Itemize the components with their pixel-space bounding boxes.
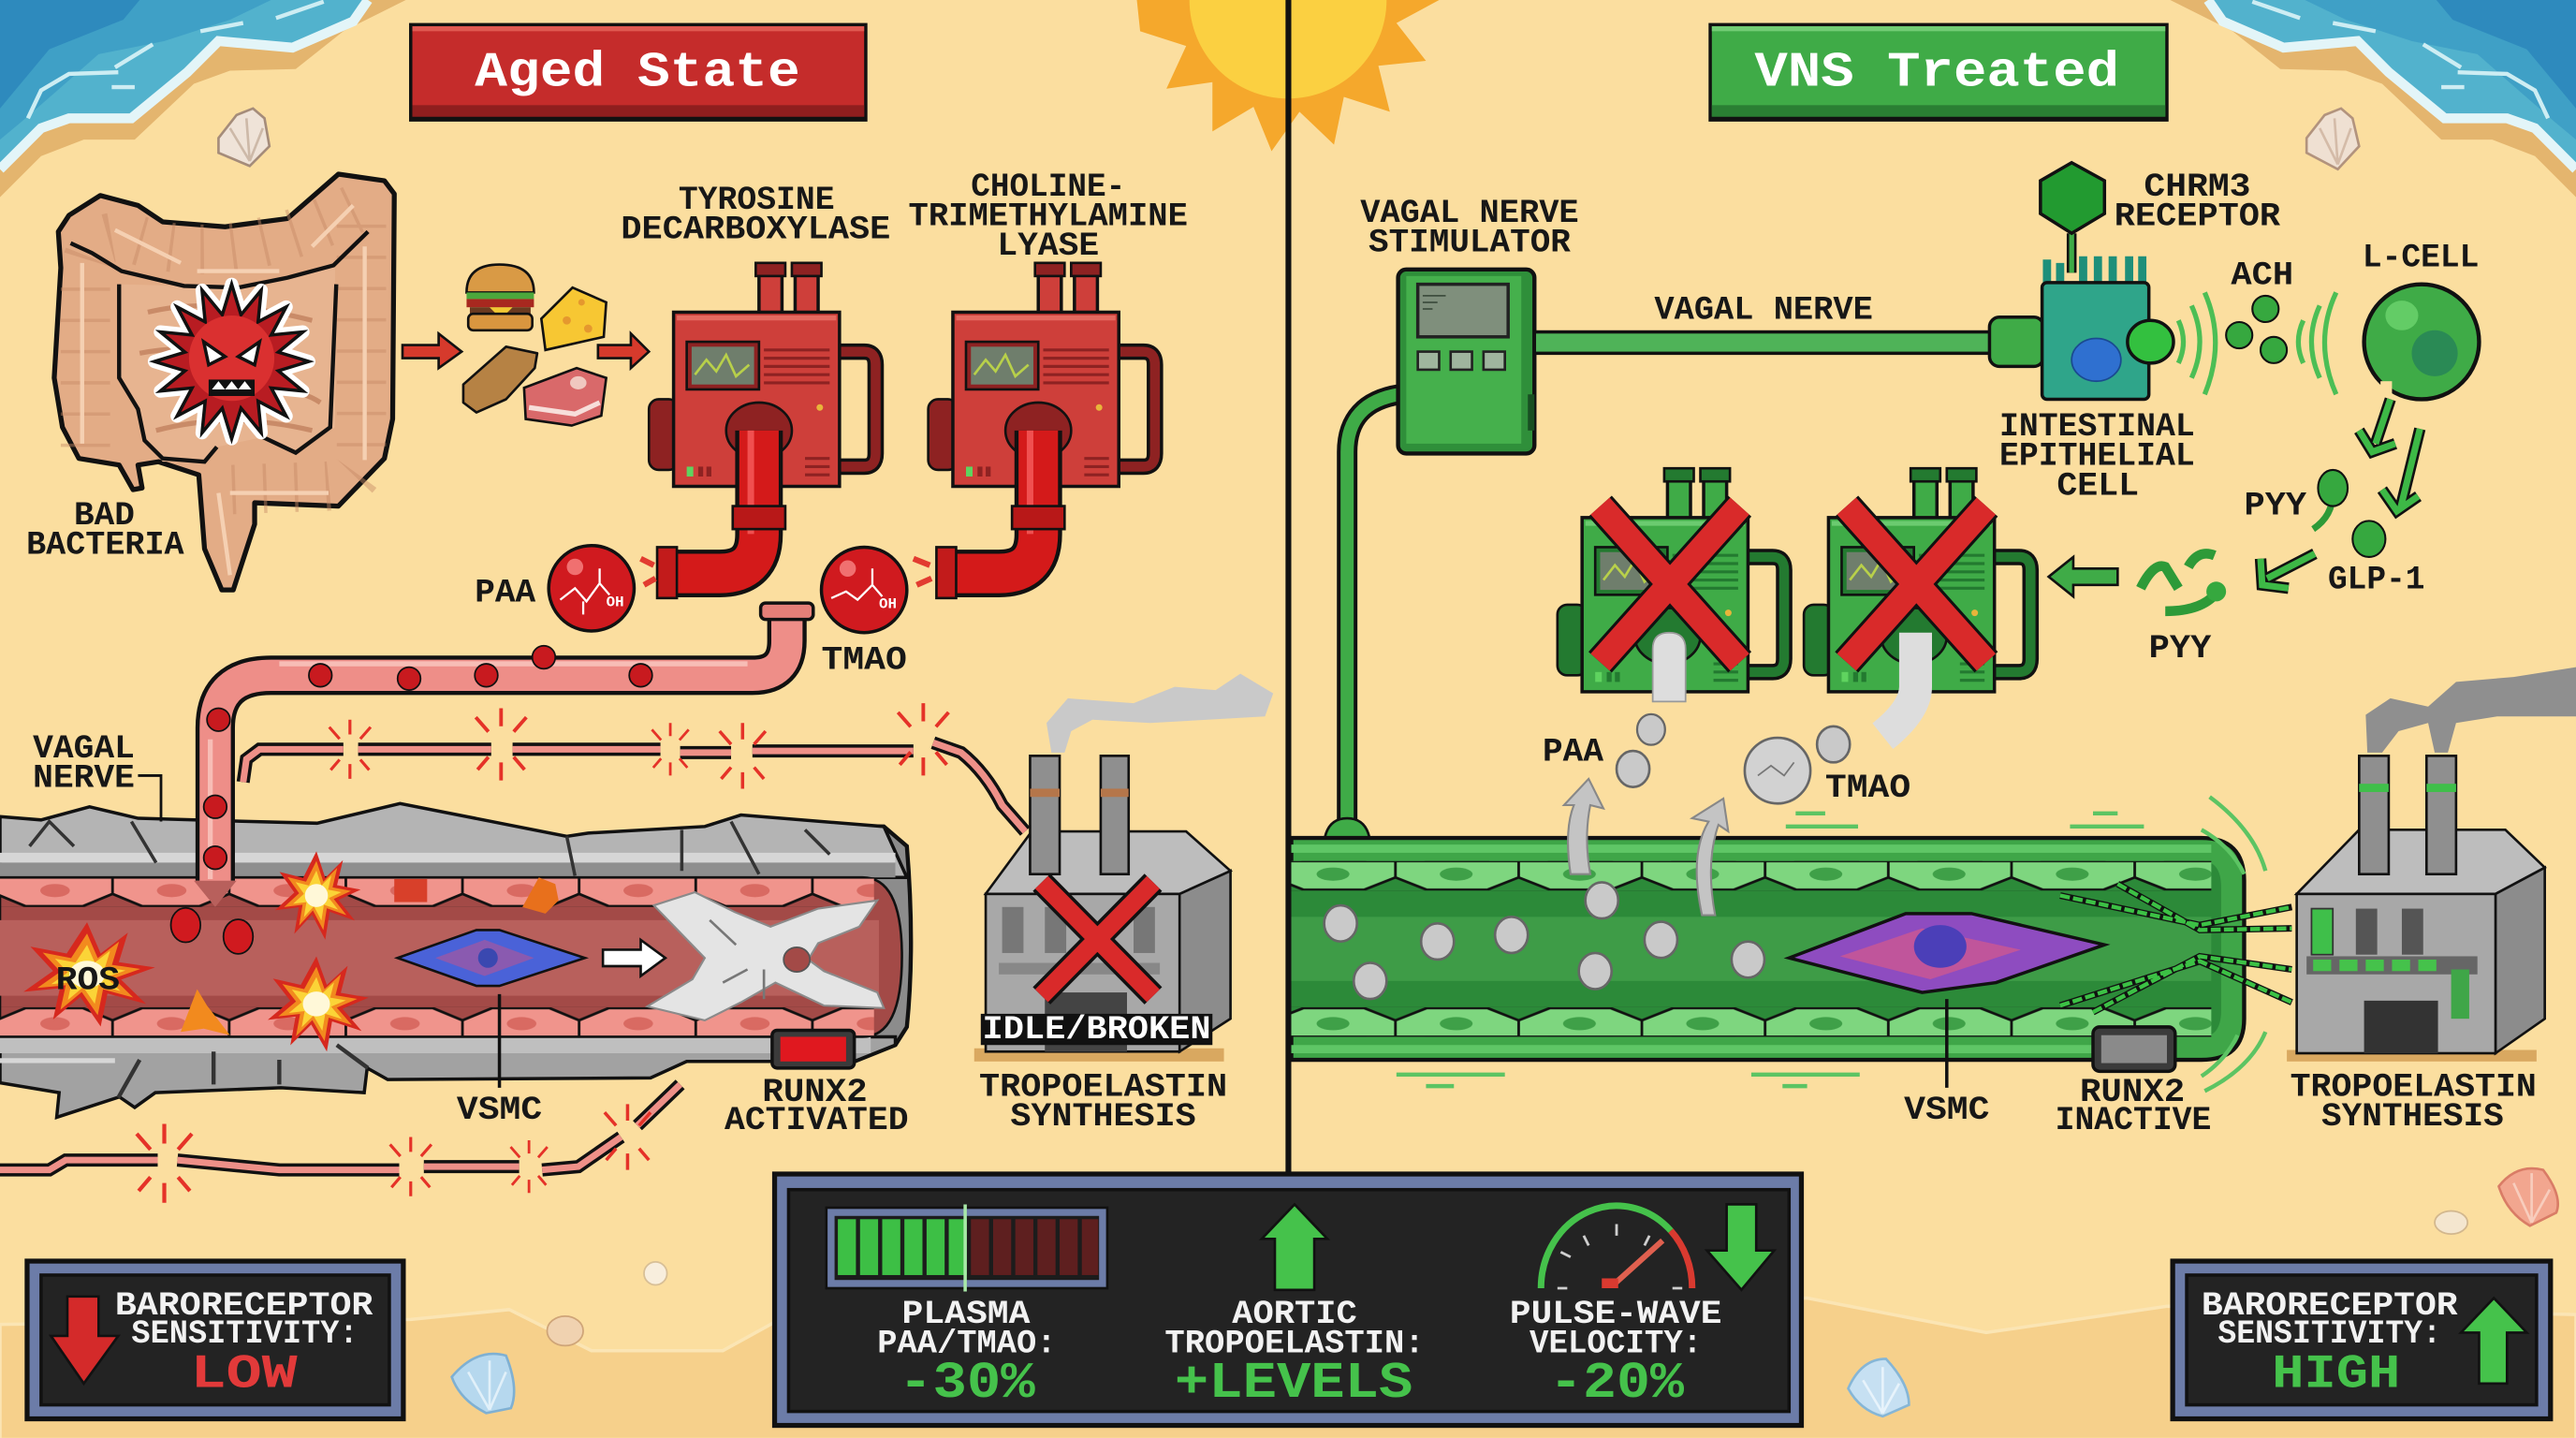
burst upper bbox=[275, 851, 360, 940]
metric: aortic tropoelastin: AORTIC bbox=[1232, 1296, 1357, 1333]
machine inhibited 2 bbox=[1804, 468, 2030, 736]
cable to artery bbox=[1325, 394, 1399, 842]
arrow: food to enzyme bbox=[598, 333, 649, 368]
centre divider bbox=[1285, 0, 1292, 1177]
vsmc cell healthy bbox=[1789, 914, 2104, 992]
label: PYY lower: PYY bbox=[2149, 630, 2211, 668]
label: chrm3 receptor: CHRM3 bbox=[2144, 169, 2250, 206]
label: L-cell: L-CELL bbox=[2363, 239, 2479, 276]
pebble right bbox=[2435, 1211, 2467, 1234]
burst ROS bbox=[23, 922, 155, 1026]
receptor hexagon bbox=[2041, 163, 2104, 272]
metric: aortic tropoelastin: TROPOELASTIN: bbox=[1164, 1325, 1425, 1362]
metric: pulse wave velocity: VELOCITY: bbox=[1530, 1325, 1702, 1362]
RUNX2 switch red bbox=[772, 1030, 855, 1068]
label: tropoelastin synthesis left bbox=[979, 1069, 1227, 1136]
label: vsmc right: VSMC bbox=[1904, 1092, 1989, 1129]
molecule: TMAO bbox=[822, 547, 907, 633]
metric: plasma: PAA/TMAO: bbox=[877, 1325, 1057, 1362]
ach molecules bbox=[2226, 296, 2287, 363]
shell bottom blue right bbox=[1848, 1358, 1909, 1416]
label: vsmc right bbox=[1904, 999, 1989, 1129]
label: vagal nerve stimulator: VAGAL NERVE bbox=[1360, 195, 1579, 232]
label: tropoelastin synthesis left: TROPOELASTIN bbox=[979, 1069, 1227, 1107]
label: runx2 inactive bbox=[2056, 1074, 2211, 1139]
damaged vagal nerve bbox=[0, 703, 1025, 1203]
label: bad bacteria: BACTERIA bbox=[26, 526, 185, 564]
metric: pulse wave velocity: PULSE-WAVE bbox=[1510, 1296, 1721, 1333]
burst lower bbox=[268, 957, 369, 1051]
label: vagal nerve stimulator bbox=[1360, 195, 1579, 262]
label: vagal nerve left bbox=[33, 730, 161, 822]
title: vns treated bbox=[1708, 23, 2169, 122]
label: chrm3 receptor bbox=[2115, 169, 2281, 235]
machine: choline trimethylamine lyase bbox=[914, 263, 1155, 598]
label: runx2 inactive: RUNX2 bbox=[2080, 1074, 2185, 1111]
molecule: TMAO: OH bbox=[879, 595, 897, 612]
motion ticks bbox=[1397, 797, 2265, 1091]
RUNX2 switch off bbox=[2093, 1027, 2175, 1071]
label: vagal nerve: VAGAL NERVE bbox=[1654, 291, 1873, 329]
label: vagal nerve stimulator: STIMULATOR bbox=[1368, 225, 1572, 262]
factory idle bbox=[974, 674, 1273, 1062]
panel: baroreceptor low bbox=[24, 1258, 406, 1421]
label: intestinal epithelial cell: INTESTINAL bbox=[1999, 408, 2195, 446]
label: tropoelastin synthesis right: SYNTHESIS bbox=[2321, 1098, 2504, 1136]
label: vagal nerve left: VAGAL bbox=[33, 730, 135, 768]
shell pink right bbox=[2499, 1168, 2558, 1225]
panel: vns treated bbox=[1292, 23, 2576, 1139]
arrows from L-cell bbox=[2261, 399, 2420, 588]
elastin fibres bbox=[2060, 884, 2291, 1012]
arrow to machines bbox=[2049, 557, 2117, 596]
text: baroreceptor sensitivity: BARORECEPTOR bbox=[115, 1287, 373, 1325]
text: baroreceptor sensitivity: SENSITIVITY: bbox=[2217, 1315, 2441, 1353]
factory active bbox=[2287, 668, 2576, 1062]
beach corner top left bbox=[0, 0, 406, 198]
label: choline trimethylamine lyase: TRIMETHYLAMINE bbox=[909, 198, 1188, 235]
metric: pulse wave velocity: -20% bbox=[1549, 1356, 1684, 1413]
value: high: HIGH bbox=[2272, 1348, 2400, 1401]
machine: tyrosine decarboxylase bbox=[640, 263, 875, 598]
signal waves bbox=[2178, 292, 2336, 394]
efflux arrows bbox=[1564, 779, 1728, 916]
aged artery bbox=[0, 803, 911, 1117]
label: vagal nerve left: NERVE bbox=[33, 760, 135, 798]
gauge: speedometer bbox=[1541, 1206, 1692, 1288]
label: tyrosine decarboxylase: DECARBOXYLASE bbox=[621, 211, 890, 248]
metric: aortic tropoelastin: +LEVELS bbox=[1175, 1356, 1412, 1413]
beach corner top right bbox=[2170, 0, 2576, 198]
label: runx2 activated bbox=[724, 1074, 909, 1139]
damage smear upper bbox=[394, 879, 427, 902]
arrow: bacteria to food bbox=[402, 333, 461, 368]
text: baroreceptor sensitivity bbox=[115, 1287, 373, 1353]
gauge: plasma level bar bbox=[827, 1204, 1107, 1292]
icon: unhealthy gut bbox=[54, 174, 394, 590]
metric: pulse wave velocity bbox=[1510, 1296, 1721, 1413]
label: idle broken: IDLE/BROKEN bbox=[983, 1011, 1211, 1049]
text: baroreceptor sensitivity: SENSITIVITY: bbox=[131, 1315, 359, 1353]
panel: aged state bbox=[0, 23, 1273, 1203]
label: choline trimethylamine lyase bbox=[909, 169, 1188, 265]
arrow: vsmc to calcification bbox=[603, 940, 666, 976]
label: PAA: PAA bbox=[475, 574, 536, 611]
label: TMAO right: TMAO bbox=[1825, 770, 1910, 807]
metric: plasma bbox=[877, 1296, 1057, 1413]
intestinal epithelial cell bbox=[2042, 257, 2174, 399]
lower wet sand bbox=[0, 1299, 2576, 1438]
label: runx2 inactive: INACTIVE bbox=[2056, 1102, 2211, 1139]
shell bottom blue left bbox=[452, 1354, 514, 1413]
label: ACH: ACH bbox=[2231, 257, 2293, 295]
pebble lower left bbox=[547, 1316, 583, 1345]
label: tyrosine decarboxylase bbox=[621, 182, 890, 248]
icon: green up arrow bbox=[1262, 1204, 1327, 1290]
shell top right bbox=[2306, 109, 2359, 169]
molecule PYY drop bbox=[2313, 470, 2348, 529]
icon: red down arrow bbox=[51, 1297, 118, 1384]
panel: baroreceptor high bbox=[2170, 1258, 2553, 1421]
label: choline trimethylamine lyase: LYASE bbox=[997, 227, 1099, 265]
title: aged state bbox=[409, 23, 868, 122]
icon: bad bacteria virus bbox=[154, 285, 309, 439]
title: vns treated: VNS Treated bbox=[1754, 44, 2119, 100]
label: intestinal epithelial cell bbox=[1999, 408, 2195, 505]
label: TMAO: TMAO bbox=[822, 641, 907, 679]
squiggle peptides bbox=[2141, 553, 2226, 611]
vagal nerve fibre bbox=[1534, 317, 2043, 366]
label: runx2 activated: RUNX2 bbox=[762, 1074, 868, 1111]
inactive molecules bbox=[1617, 714, 1850, 803]
lumen particles bbox=[1325, 882, 1764, 999]
title: aged state: Aged State bbox=[475, 44, 800, 100]
label: tropoelastin synthesis right: TROPOELASTIN bbox=[2291, 1069, 2537, 1107]
label: intestinal epithelial cell: EPITHELIAL bbox=[1999, 438, 2195, 476]
sun bbox=[1137, 0, 1439, 151]
icon: green up arrow bbox=[2461, 1299, 2526, 1384]
metric: aortic tropoelastin bbox=[1164, 1296, 1425, 1413]
label: vsmc left: VSMC bbox=[457, 1092, 542, 1129]
healthy artery bbox=[1292, 838, 2291, 1071]
molecule: PAA: OH bbox=[607, 594, 624, 611]
label: tyrosine decarboxylase: TYROSINE bbox=[679, 182, 835, 219]
icon: food group bbox=[463, 265, 607, 426]
red cross factory bbox=[1042, 882, 1153, 996]
shell top left bbox=[218, 109, 270, 166]
label: PAA right: PAA bbox=[1543, 734, 1604, 771]
stimulator device bbox=[1398, 270, 1534, 453]
label: chrm3 receptor: RECEPTOR bbox=[2115, 198, 2281, 235]
label: intestinal epithelial cell: CELL bbox=[2056, 467, 2139, 505]
value: low: LOW bbox=[191, 1348, 298, 1401]
L-cell bbox=[2364, 285, 2479, 399]
calcified plaque bbox=[648, 892, 884, 1020]
text: baroreceptor sensitivity bbox=[2202, 1287, 2459, 1353]
burst ember bbox=[522, 877, 559, 914]
pebble centre left bbox=[644, 1262, 667, 1284]
label: runx2 activated: ACTIVATED bbox=[724, 1102, 909, 1139]
label: tropoelastin synthesis left: SYNTHESIS bbox=[1010, 1098, 1196, 1136]
vsmc cell aged bbox=[398, 930, 585, 986]
panel: outcome metrics bbox=[772, 1171, 1804, 1428]
label: PYY upper: PYY bbox=[2244, 487, 2306, 524]
label: bad bacteria bbox=[26, 497, 185, 564]
machine inhibited 1 bbox=[1558, 468, 1784, 701]
label: tropoelastin synthesis right bbox=[2291, 1069, 2537, 1136]
label: GLP-1: GLP-1 bbox=[2328, 561, 2425, 598]
molecule GLP-1 bbox=[2352, 521, 2385, 557]
text: baroreceptor sensitivity: BARORECEPTOR bbox=[2202, 1287, 2459, 1325]
metric: plasma: -30% bbox=[899, 1356, 1035, 1413]
molecule: PAA bbox=[549, 546, 634, 631]
burst ROS: ROS bbox=[56, 962, 120, 1000]
metric: plasma: PLASMA bbox=[902, 1296, 1031, 1333]
label: choline trimethylamine lyase: CHOLINE- bbox=[971, 169, 1125, 206]
icon: green down arrow bbox=[1707, 1204, 1775, 1290]
feed pipe bbox=[171, 603, 813, 954]
label: bad bacteria: BAD bbox=[74, 497, 135, 535]
burst small bbox=[181, 990, 230, 1035]
